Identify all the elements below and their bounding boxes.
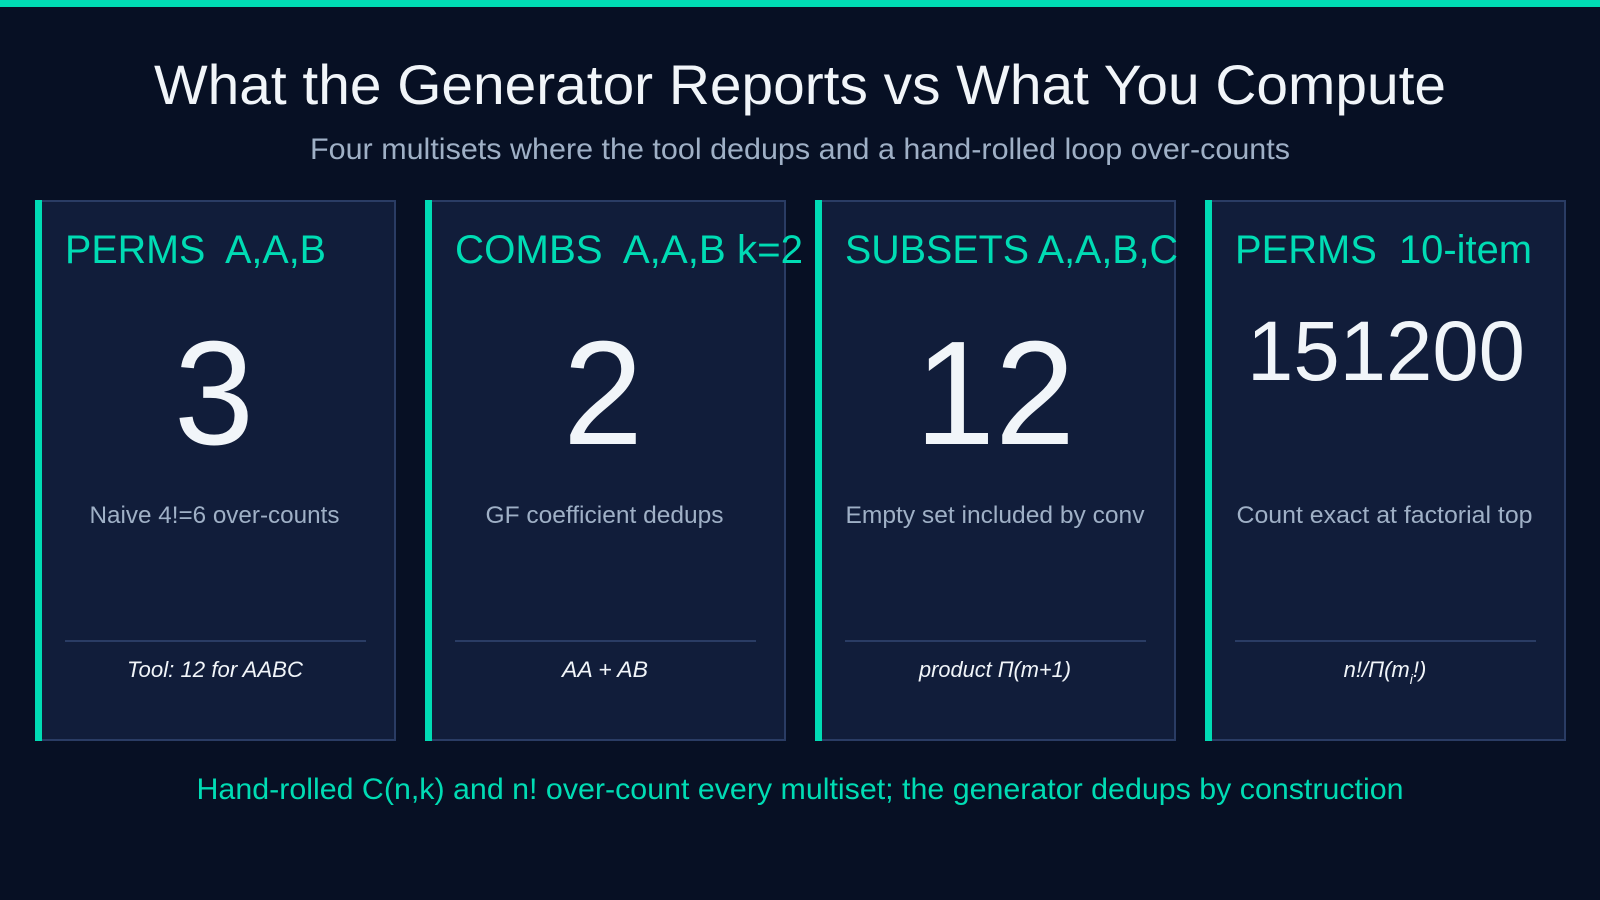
- description: Count exact at factorial top: [1236, 502, 1532, 529]
- formula note: product Π(m+1): [918, 657, 1071, 682]
- top accent bar: [0, 0, 1600, 7]
- subtitle: Four multisets where the tool dedups and a hand-rolled loop over-counts: [310, 133, 1290, 166]
- panel: perms A,A,B: [35, 200, 395, 741]
- big number: 151200: [1247, 304, 1525, 398]
- formula note: n!/Π(m: [1344, 657, 1410, 682]
- card label: COMBS A,A,B k=2: [455, 228, 803, 272]
- formula note: !): [1413, 657, 1426, 682]
- description: GF coefficient dedups: [486, 502, 724, 529]
- panel: combs A,A,B k=2: [425, 200, 803, 741]
- formula note: AA + AB: [560, 657, 648, 682]
- footer takeaway: Hand-rolled C(n,k) and n! over-count every multiset; the generator dedups by construction: [196, 773, 1404, 806]
- formula note: Tool: 12 for AABC: [127, 657, 303, 682]
- panel: perms 10-item: [1205, 200, 1565, 741]
- description: Empty set included by conv: [846, 502, 1144, 529]
- description: Naive 4!=6 over-counts: [90, 502, 340, 529]
- card label: PERMS A,A,B: [65, 228, 326, 272]
- title: What the Generator Reports vs What You Compute: [154, 53, 1446, 116]
- big number: 3: [174, 311, 254, 476]
- card label: PERMS 10-item: [1235, 228, 1532, 272]
- panel: subsets A,A,B,C: [815, 200, 1178, 741]
- big number: 12: [915, 311, 1075, 476]
- big number: 2: [563, 311, 643, 476]
- card label: SUBSETS A,A,B,C: [845, 228, 1178, 272]
- formula note: i: [1410, 671, 1414, 687]
